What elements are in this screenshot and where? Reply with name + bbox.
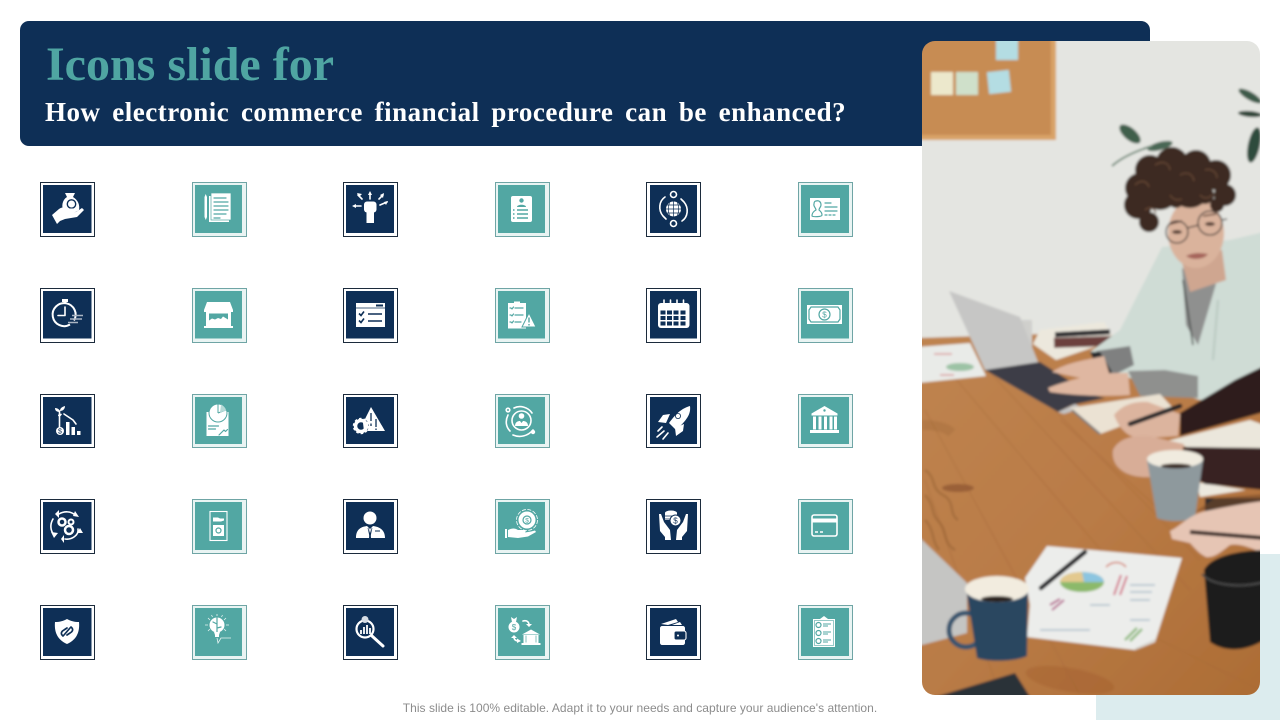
icon: globe with currency cycle: [646, 182, 700, 236]
icon: hands holding coins: $: [673, 516, 678, 526]
icon: shield with chain link: [40, 606, 94, 660]
icon: stopwatch with speed lines: [40, 288, 94, 342]
dark tablet: [936, 672, 1030, 695]
icon: storefront: [192, 288, 246, 342]
icon: hand with globe coin: [496, 500, 550, 554]
person: glasses: [1166, 211, 1227, 243]
icon: wallet: [646, 606, 700, 660]
notebook under hands: [1070, 394, 1172, 434]
icon: documents and pen: [192, 182, 246, 236]
blue mug: [949, 613, 983, 647]
pie chart on paper: [1059, 580, 1105, 594]
icon: clipboard with warning: [496, 288, 550, 342]
person: neck and face: [1180, 250, 1226, 292]
icon: bank building: [798, 394, 852, 448]
icon: profile document: [496, 182, 550, 236]
plants: [1118, 123, 1142, 145]
icon: banknote: [798, 288, 852, 342]
lower left laptop: [918, 536, 967, 646]
title: Icons slide for: [46, 38, 334, 91]
icon: credit card: [798, 500, 852, 554]
icon: calendar: [646, 288, 700, 342]
icon: raised fist with arrows: [344, 182, 398, 236]
icon: mobile with handshake and email: [192, 500, 246, 554]
icon: checklist window: [344, 288, 398, 342]
icon: identity card: [798, 182, 852, 236]
person: hair: [1124, 147, 1236, 232]
central paper: [1025, 546, 1182, 650]
grey cup: [1147, 460, 1203, 521]
black tumbler: [1204, 550, 1264, 649]
dark sleeve upper: [1180, 366, 1264, 436]
corner accent panel: [1096, 554, 1280, 720]
icon grid: [40, 182, 853, 660]
footer note: This slide is 100% editable. Adapt it to your needs and capture your audience's attention.: [403, 701, 877, 715]
icon: money bag and bank exchange: $: [512, 623, 517, 632]
icon: person in orbit: [496, 394, 550, 448]
icon: gears in cycle: [40, 500, 94, 554]
lower right hand with pen: [1170, 501, 1264, 557]
person: torso and jacket: [1090, 232, 1264, 400]
icon: checklist clipboard: [798, 606, 852, 660]
left paper: [918, 343, 986, 383]
white papers right: [1167, 420, 1264, 450]
icon: hand with globe coin: $: [525, 518, 529, 524]
hand with pen: [1114, 402, 1180, 438]
subtitle: How electronic commerce financial procedure can be enhanced?: [45, 97, 846, 127]
table: [918, 332, 1264, 700]
icon: businessman: [344, 500, 398, 554]
icon: rocket: [646, 394, 700, 448]
laptop: [950, 292, 1040, 372]
photo: team meeting at wooden table: [922, 41, 1260, 695]
icon: plant and declining bars: [40, 394, 94, 448]
icon: pie chart report: [192, 394, 246, 448]
book and phone: [1033, 322, 1115, 360]
icon: money bag and bank exchange: [496, 606, 550, 660]
cork board: [918, 36, 1056, 140]
lower hand and sleeve: [1113, 436, 1184, 477]
icon: magnifier with chart: [344, 606, 398, 660]
icon: hands holding coins: [646, 500, 700, 554]
icon: money bag in hand: [40, 182, 94, 236]
icon: brain light bulb: [192, 606, 246, 660]
icon: banknote: $: [822, 310, 827, 320]
icon: gear and warning triangle: [344, 394, 398, 448]
title banner: [20, 21, 1150, 146]
icon: plant and declining bars: $: [58, 428, 62, 436]
